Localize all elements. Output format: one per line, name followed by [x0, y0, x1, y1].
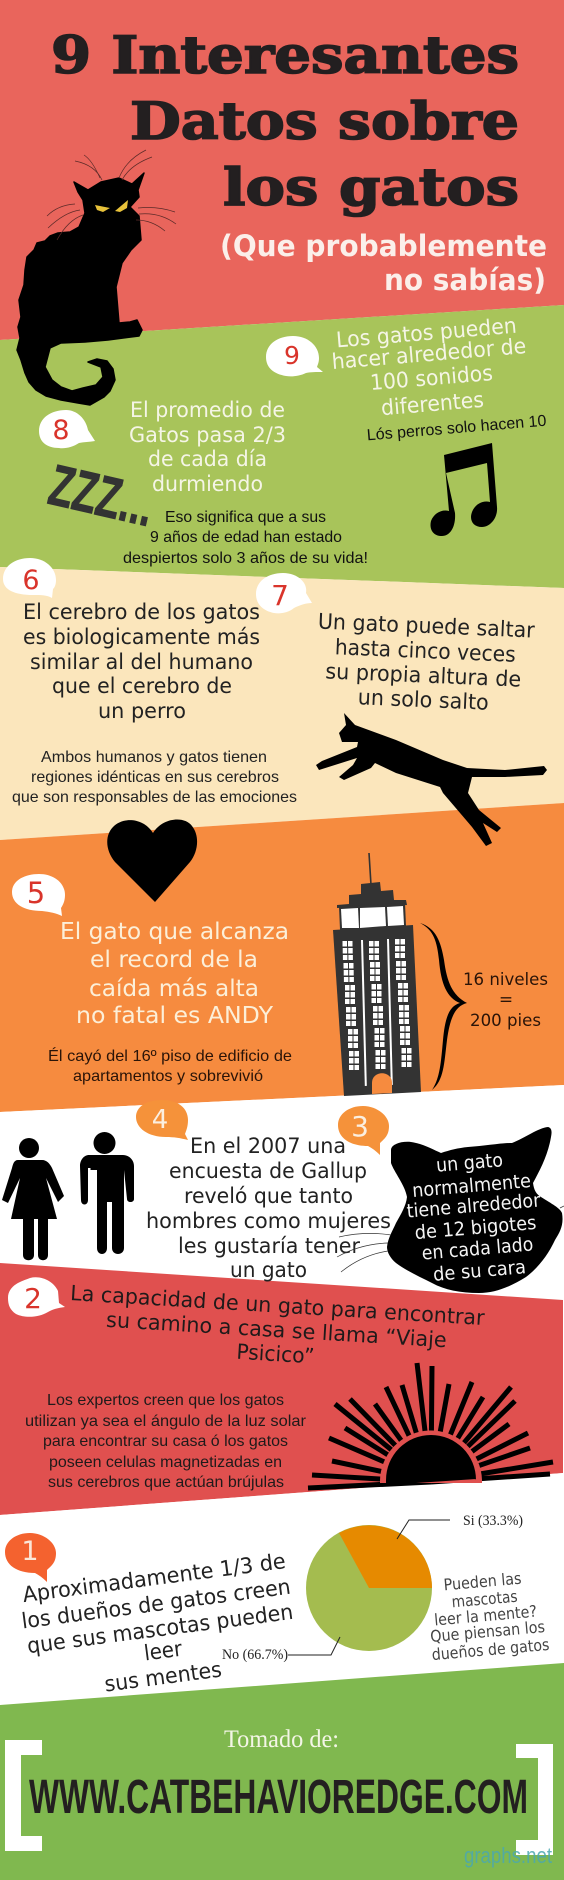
text: fact 3: de 12 bigotes [414, 1212, 537, 1244]
text: fact 1 heading: sus mentes [103, 1658, 223, 1698]
icon: speech bubble 5: 5 [27, 876, 45, 910]
text: chart caption [429, 1569, 550, 1664]
text: source label: Tomado de: [224, 1726, 339, 1753]
text: chart caption: leer la mente? [433, 1602, 538, 1629]
title: 9 Interesantes [51, 26, 519, 86]
text: height label: = [499, 990, 513, 1010]
text: fact 9 heading: Los gatos pueden [335, 314, 518, 353]
icon: speech bubble 7: 7 [271, 579, 289, 612]
chart label: Si [397, 1513, 523, 1539]
text: fact 4: encuesta de Gallup [169, 1159, 367, 1184]
text: fact 3: en cada lado [421, 1233, 534, 1265]
text: fact 3: normalmente [411, 1170, 532, 1202]
fact 2 [8, 1277, 553, 1491]
text: height label [463, 970, 548, 1031]
text: fact 4: hombres como mujeres [146, 1209, 391, 1234]
text: fact 2 detail: sus cerebros que actúan brújulas [48, 1474, 284, 1491]
text: fact 4: En el 2007 una [190, 1134, 346, 1159]
text: fact 5 heading: caída más alta [89, 976, 259, 1002]
title: los gatos [223, 158, 519, 218]
text: fact 2 heading [70, 1281, 486, 1368]
text: fact 6 heading: similar al del humano [30, 650, 253, 675]
icon: cat whiskers [47, 150, 176, 240]
chart label: No: No (66.7%) [222, 1647, 288, 1663]
icon: speech bubble 1: 1 [21, 1536, 39, 1567]
text: fact 8 heading [129, 398, 286, 497]
fact 7 [256, 573, 547, 846]
text: height label: 16 niveles [463, 970, 548, 990]
text: fact 4 [146, 1134, 391, 1283]
icon: speech bubble 9 [266, 336, 323, 376]
text: fact 8 heading: El promedio de [130, 398, 285, 423]
icon: speech bubble 4: 4 [152, 1105, 168, 1135]
text: fact 2 heading: Psicico” [236, 1340, 315, 1368]
text: fact 9 heading [331, 314, 527, 421]
fact 9 [266, 314, 547, 536]
fact 6 [3, 558, 297, 806]
icon: speech bubble 4 [136, 1100, 188, 1140]
panel: facts 4 and 3 background [0, 1085, 564, 1300]
panel: fact 5 background [0, 803, 564, 1112]
fact 1 [5, 1513, 550, 1698]
text: fact 3: un gato [435, 1149, 504, 1177]
subtitle [220, 229, 547, 297]
icon: speech bubble 2: 2 [24, 1282, 42, 1315]
text: fact 6 detail: regiones idénticas en sus cerebros [31, 769, 279, 786]
text: fact 9 heading: hacer alrededor de [331, 334, 527, 375]
text: fact 1 heading: Aproximadamente 1/3 de [21, 1549, 287, 1608]
text: fact 7 heading [317, 609, 535, 716]
icon: speech bubble 8: 8 [52, 415, 70, 446]
text: fact 2 detail [25, 1392, 307, 1491]
text: fact 6 heading: que el cerebro de [52, 674, 232, 699]
fact 8 [39, 398, 368, 567]
text: fact 5 detail [48, 1046, 292, 1085]
icon: heart [107, 820, 197, 902]
icon: building door [372, 1073, 392, 1094]
text: fact 2 detail: utilizan ya sea el ángulo de la luz solar [25, 1413, 307, 1430]
panel: fact 1 background [0, 1473, 564, 1705]
text: fact 4: reveló que tanto [184, 1184, 353, 1209]
text: fact 9 heading: diferentes [380, 388, 485, 421]
text: chart caption: Pueden las [443, 1569, 522, 1594]
text: fact 6 heading: un perro [98, 699, 186, 724]
icon: speech bubble 8 [39, 410, 95, 448]
text: fact 2 detail: poseen celulas magnetizadas en [49, 1454, 282, 1471]
text: fact 8 heading: Gatos pasa 2/3 [129, 423, 286, 448]
text: fact 3: de su cara [432, 1256, 527, 1286]
text: fact 9 detail: Lós perros solo hacen 10 [366, 413, 547, 444]
pie chart [222, 1513, 523, 1663]
fact 5 [12, 853, 548, 1096]
text: chart caption: mascotas [451, 1587, 518, 1611]
text: fact 7 heading: su propia altura de [325, 659, 522, 693]
text: fact 8 heading: durmiendo [152, 472, 263, 497]
text: fact 8 detail [123, 509, 368, 567]
text: fact 1 heading: los dueños de gatos creen [20, 1575, 292, 1634]
text: fact 6 heading: El cerebro de los gatos [23, 600, 260, 625]
text: fact 6 heading: es biologicamente más [23, 625, 260, 650]
icon: speech bubble 2 [8, 1277, 65, 1317]
subtitle: no sabías) [384, 263, 546, 297]
icon: left bracket [5, 1740, 42, 1851]
title: Datos sobre [130, 92, 519, 152]
text: fact 8 detail: despiertos solo 3 años de su vida! [123, 550, 368, 567]
text: fact 4: les gustaría tener [178, 1234, 360, 1259]
panel: title background [0, 0, 564, 340]
footer [5, 1726, 553, 1868]
text: fact 6 detail [12, 749, 297, 806]
text: fact 5 heading: no fatal es ANDY [76, 1003, 274, 1029]
text: fact 7 heading: Un gato puede saltar [317, 609, 535, 644]
text: fact 5 heading: El gato que alcanza [60, 919, 289, 945]
text: fact 8 detail: Eso significa que a sus [165, 509, 326, 526]
text: height label: 200 pies [470, 1011, 541, 1031]
icon: speech bubble 3 [338, 1106, 389, 1155]
text: fact 5 detail: apartamentos y sobrevivió [73, 1068, 263, 1085]
icon: right bracket [516, 1744, 553, 1855]
text: fact 2 detail: para encontrar su casa ó los gatos [43, 1433, 288, 1450]
text: fact 6 detail: que son responsables de las emociones [12, 789, 297, 806]
text: fact 1 heading: leer [143, 1637, 184, 1666]
icon: black cat sitting [17, 150, 176, 405]
fact 4 [2, 1100, 391, 1283]
icon: cat head whiskers [337, 1206, 564, 1272]
icon: speech bubble 5 [12, 874, 65, 916]
text: fact 1 heading [20, 1549, 295, 1698]
panel: footer background [0, 1663, 564, 1880]
text: fact 6 heading [23, 600, 260, 724]
icon: speech bubble 1 [5, 1533, 56, 1582]
text: fact 5 detail: Él cayó del 16º piso de edificio de [48, 1046, 292, 1065]
icon: speech bubble 6 [3, 558, 56, 598]
text: fact 7 heading: un solo salto [357, 685, 489, 716]
icon: sun with rays [308, 1363, 553, 1488]
panel: facts 9 and 8 background [0, 305, 564, 588]
chart label: Si: Si (33.3%) [463, 1513, 523, 1529]
icon: jumping cat [316, 713, 547, 846]
icon: speech bubble 3: 3 [351, 1110, 369, 1143]
icon: cat eyes [95, 200, 128, 212]
icon: woman and man figures [2, 1132, 134, 1260]
fact 3 [337, 1106, 564, 1293]
text: fact 6 detail: Ambos humanos y gatos tienen [41, 749, 267, 766]
text: fact 9 heading: 100 sonidos [369, 361, 494, 396]
text: fact 5 heading: el record de la [90, 947, 258, 973]
subtitle: (Que probablemente [220, 229, 547, 263]
text: fact 3 [406, 1149, 541, 1286]
chart label: No [222, 1637, 340, 1663]
text: fact 8 detail: 9 años de edad han estado [150, 529, 342, 546]
text: fact 8 heading: de cada día [148, 447, 267, 472]
text: fact 1 heading: que sus mascotas pueden [26, 1600, 295, 1659]
icon: ZZZ sleep text: ZZZ... [43, 452, 160, 539]
text: fact 5 heading [60, 919, 289, 1029]
text: fact 4: un gato [230, 1258, 307, 1283]
icon: music note [430, 443, 497, 536]
text: chart caption: Que piensan los [429, 1617, 546, 1646]
text: fact 2 detail: Los expertos creen que los gatos [47, 1392, 284, 1409]
icon: speech bubble 6: 6 [22, 565, 40, 596]
icon: curly brace [420, 923, 467, 1090]
icon: cat head [387, 1127, 563, 1293]
text: fact 3: tiene alrededor [406, 1189, 541, 1223]
text: fact 7 heading: hasta cinco veces [334, 635, 516, 668]
text: chart caption: dueños de gatos [431, 1635, 550, 1664]
text: fact 2 heading: La capacidad de un gato para encontrar [70, 1281, 486, 1330]
title [51, 26, 519, 218]
icon: tall building [333, 853, 421, 1096]
icon: speech bubble 7 [256, 573, 312, 613]
panel: fact 2 background [0, 1263, 563, 1515]
text: fact 2 heading: su camino a casa se llama “Viaje [106, 1308, 447, 1352]
panel: facts 6 and 7 background [0, 567, 564, 840]
icon: speech bubble 9: 9 [284, 341, 300, 370]
